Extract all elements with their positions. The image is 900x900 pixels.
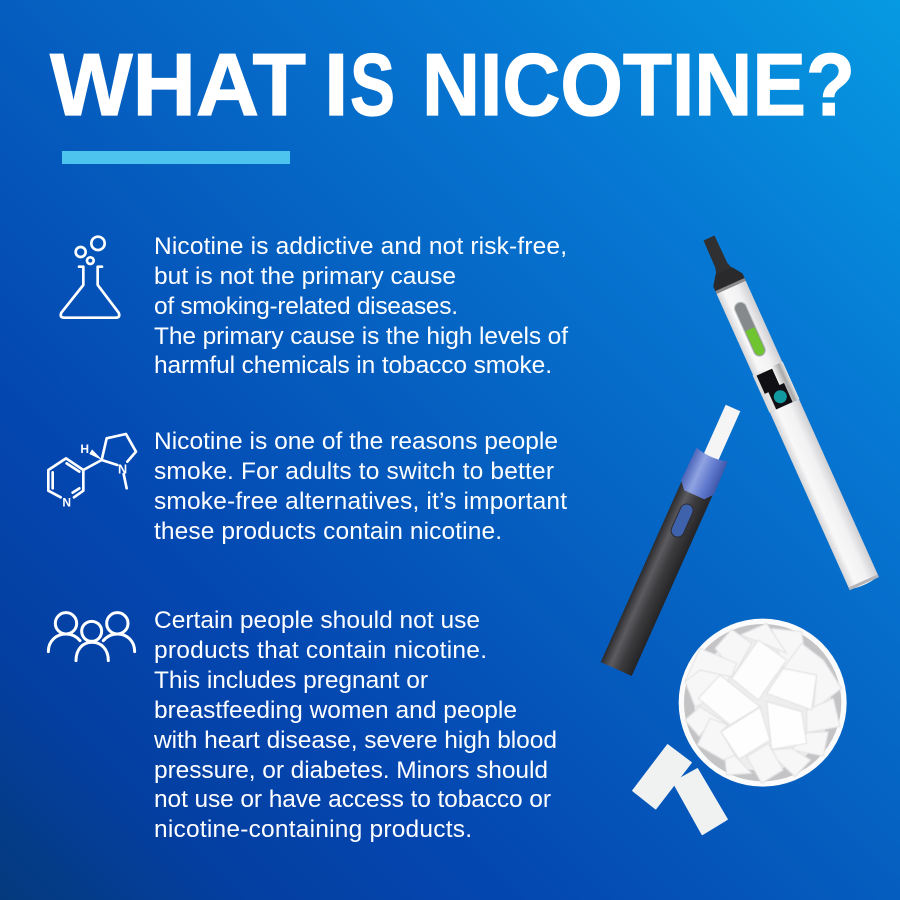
- text: nicotine is addictive: The primary cause is the high levels of: [154, 323, 568, 350]
- text: nicotine is addictive: of smoking-related diseases.: [154, 293, 458, 320]
- title: NICOTINE?: [422, 35, 855, 134]
- text: reasons people smoke: smoke-free alternatives, it’s important: [154, 488, 567, 515]
- text: who should not use nicotine: nicotine-containing products.: [154, 816, 472, 843]
- icon: nicotine molecule: N: [62, 496, 71, 510]
- loose nicotine pouches: [633, 745, 727, 834]
- text: who should not use nicotine: [153, 607, 557, 843]
- text: who should not use nicotine: products that contain nicotine.: [154, 637, 487, 664]
- text: reasons people smoke: these products contain nicotine.: [154, 518, 502, 545]
- title underline accent: [62, 151, 290, 164]
- icon: group of people: [48, 613, 135, 661]
- text: who should not use nicotine: pressure, or diabetes. Minors should: [154, 757, 548, 784]
- panel: who should not use: [48, 607, 557, 843]
- panel: why people smoke: [48, 428, 567, 545]
- icon: nicotine molecule: H: [80, 442, 89, 456]
- text: who should not use nicotine: not use or have access to tobacco or: [154, 786, 551, 813]
- title: WHAT: [50, 35, 306, 134]
- icon: nicotine molecule: [48, 434, 136, 510]
- icon: nicotine molecule: N: [118, 462, 127, 476]
- text: who should not use nicotine: This includes pregnant or: [154, 667, 428, 694]
- text: nicotine is addictive: [154, 233, 568, 379]
- bowl of nicotine pouches: [679, 619, 847, 787]
- panel: nicotine risk: [61, 233, 568, 379]
- text: nicotine is addictive: Nicotine is addictive and not risk-free,: [154, 233, 567, 260]
- text: nicotine is addictive: but is not the primary cause: [154, 263, 456, 290]
- title: I: [324, 35, 348, 134]
- text: nicotine is addictive: harmful chemicals in tobacco smoke.: [154, 352, 552, 379]
- title: [50, 35, 855, 134]
- heated tobacco device: [600, 401, 749, 676]
- icon: flask with bubbles: [61, 237, 119, 318]
- title: S: [350, 35, 395, 134]
- text: who should not use nicotine: Certain people should not use: [154, 607, 480, 634]
- text: who should not use nicotine: with heart disease, severe high blood: [153, 727, 557, 754]
- white e-cigarette pen: [694, 231, 880, 591]
- text: reasons people smoke: [154, 428, 567, 545]
- text: reasons people smoke: smoke. For adults to switch to better: [154, 458, 554, 485]
- text: reasons people smoke: Nicotine is one of the reasons people: [154, 428, 558, 455]
- text: who should not use nicotine: breastfeeding women and people: [154, 697, 517, 724]
